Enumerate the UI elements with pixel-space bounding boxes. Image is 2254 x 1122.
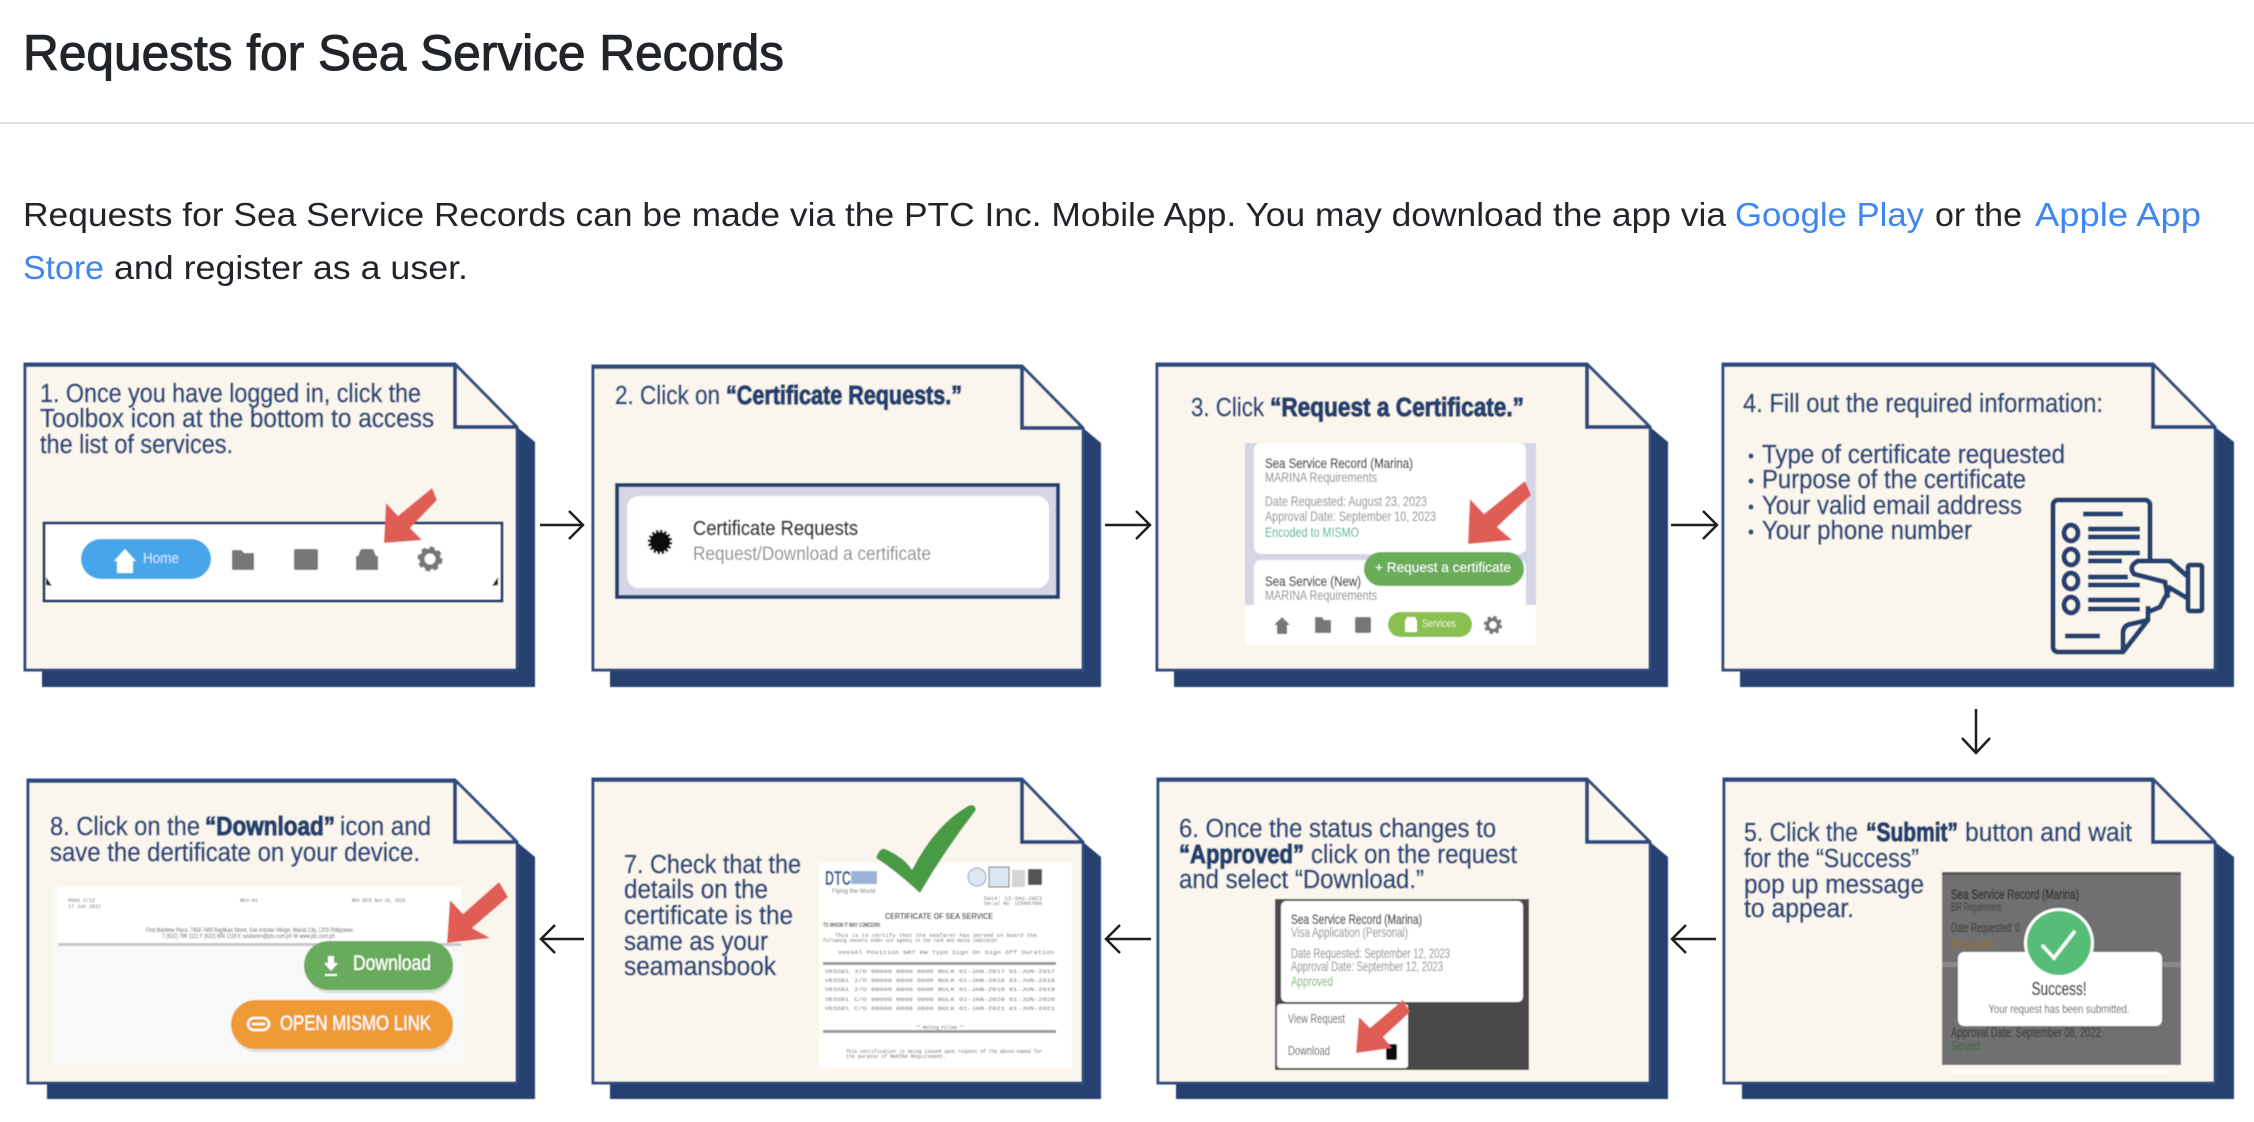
certificate document: Flying the World xyxy=(832,889,875,895)
panel: step 6: Download xyxy=(1288,1043,1330,1058)
panel: step 5 xyxy=(1724,779,2234,1099)
panel: step 5: BIR Requirement xyxy=(1951,900,2001,914)
intro paragraph: and register as a user. xyxy=(114,249,468,286)
certificate document: Vessel Position GRT KW Type Sign On Sign Off Duration xyxy=(838,950,1054,956)
arrow: step 6 to 7 xyxy=(1106,925,1151,953)
intro paragraph: Apple App xyxy=(2035,196,2201,233)
intro paragraph xyxy=(23,196,2201,286)
panel: step 3: Approval Date: September 10, 2023 xyxy=(1265,508,1436,524)
panel: step 5: Sea Service Record (Marina) xyxy=(1951,886,2079,902)
certificate document: the purpose of MARINA Requirement. xyxy=(846,1054,946,1060)
panel: step 8: REV:01 xyxy=(240,898,258,904)
panel: step 2 xyxy=(593,366,1101,687)
panel: step 5: Requested xyxy=(1951,936,1995,951)
panel: step 6: Approval Date: September 12, 2023 xyxy=(1291,958,1443,974)
intro paragraph: Google Play xyxy=(1735,196,1925,233)
certificate document: DTC xyxy=(825,868,851,890)
arrow: step 5 to 6 xyxy=(1672,925,1716,953)
panel: step 3: “Request a Certificate.” xyxy=(1270,394,1524,422)
arrow: step 2 to 3 xyxy=(1105,511,1150,539)
panel: step 2: Request/Download a certificate xyxy=(693,544,931,565)
panel: step 3: Sea Service Record (Marina) xyxy=(1265,455,1413,471)
panel: step 8: OPEN MISMO LINK xyxy=(280,1012,431,1035)
panel: step 5: for the “Success” xyxy=(1744,845,1919,873)
panel: step 8: REV DATE Nov 26, 2019 xyxy=(352,898,405,904)
panel: step 3: Date Requested: August 23, 2023 xyxy=(1265,493,1427,509)
panel: step 3: Encoded to MISMO xyxy=(1265,524,1359,540)
panel: step 6: Visa Application (Personal) xyxy=(1291,924,1408,940)
panel: step 1: Home xyxy=(143,550,179,567)
panel: step 6: Date Requested: September 12, 2023 xyxy=(1291,945,1450,961)
panel: step 8: Download xyxy=(353,952,431,975)
panel: step 8: First Maritime Place, 7458-7460 Bagtikan Street, San Antonio Village, Makati City, 1203 Philippines xyxy=(146,928,353,934)
certificate document: This is to certify that the seafarer has served on board the xyxy=(835,933,1037,939)
panel: step 7: certificate is the xyxy=(624,902,793,930)
panel: step 8: “Download” xyxy=(205,813,335,841)
certificate document: CERTIFICATE OF SEA SERVICE xyxy=(885,912,994,921)
panel: step 5: “Submit” xyxy=(1866,819,1958,847)
panel: step 6: View Request xyxy=(1288,1011,1345,1026)
certificate document: VESSEL 2/O 00000 0000 0000 BULK 01-JAN-2018 01-JUN-2018 xyxy=(825,978,1055,984)
panel: step 7: same as your xyxy=(624,928,768,956)
panel: step 5: Served xyxy=(1951,1038,1980,1053)
panel: step 6: click on the request xyxy=(1311,841,1517,869)
certificate document: ** Nothing Follows ** xyxy=(916,1025,964,1031)
panel: step 5: Approval Date: September 08, 2022 xyxy=(1951,1024,2101,1040)
certificate document: VESSEL C/O 00000 0000 0000 BULK 01-JAN-2020 01-JUN-2020 xyxy=(825,997,1055,1003)
icon: green check mark xyxy=(876,805,976,893)
intro paragraph: Requests for Sea Service Records can be made via the PTC Inc. Mobile App. You may download the app via xyxy=(23,196,1727,233)
arrow: step 7 to 8 xyxy=(541,925,584,953)
certificate document: Date: 12-Sep-2023 xyxy=(984,896,1042,902)
panel: step 1: 1. Once you have logged in, click the xyxy=(40,380,421,408)
panel: step 3: MARINA Requirements xyxy=(1265,587,1377,603)
panel: step 8 xyxy=(28,780,535,1099)
panel: step 5: button and wait xyxy=(1965,819,2132,847)
panel: step 5: 5. Click the xyxy=(1744,819,1858,847)
icon: document and hand xyxy=(2053,500,2202,652)
panel: step 8: PDOS 2/12 xyxy=(68,898,95,904)
certificate document: following vessels under our agency in the rank and dates indicated: xyxy=(823,938,999,944)
panel: step 7: details on the xyxy=(624,876,768,904)
certificate document: VESSEL 3/O 00000 0000 0000 BULK 01-JAN-2017 01-JUN-2017 xyxy=(825,969,1055,975)
panel: step 3: MARINA Requirements xyxy=(1265,469,1377,485)
panel: step 5: to appear. xyxy=(1744,895,1854,923)
panel: step 6: Sea Service Record (Marina) xyxy=(1291,911,1422,927)
panel: step 1: the list of services. xyxy=(40,431,233,459)
certificate document xyxy=(819,863,1072,1068)
arrow: step 1 to 2 xyxy=(540,511,583,539)
panel: step 4 xyxy=(1723,364,2234,687)
panel: step 4: Purpose of the certificate xyxy=(1762,466,2026,494)
panel: step 6: “Approved” xyxy=(1179,841,1304,869)
certificate document: TO WHOM IT MAY CONCERN: xyxy=(823,923,881,929)
panel: step 5: Your request has been submitted. xyxy=(1988,1002,2130,1016)
panel: step 6 xyxy=(1158,779,1668,1099)
panel: step 2: Certificate Requests xyxy=(693,518,858,540)
panel: step 3 xyxy=(1157,364,1668,687)
panel: step 3: Sea Service (New) xyxy=(1265,573,1361,589)
certificate document: This certification is being issued upon request of the above-named for xyxy=(846,1049,1042,1055)
panel: step 6: and select “Download.” xyxy=(1179,866,1424,894)
panel: step 1: Toolbox icon at the bottom to access xyxy=(40,405,434,433)
panel: step 3: Services xyxy=(1422,618,1456,630)
panel: step 8: icon and xyxy=(340,813,431,841)
panel: step 2: “Certificate Requests.” xyxy=(726,382,962,410)
panel: step 5: Date Requested: 0 xyxy=(1951,920,2020,935)
panel: step 6: 6. Once the status changes to xyxy=(1179,815,1496,843)
arrow: step 4 to 5 xyxy=(1962,709,1990,753)
panel: step 8: T (632) 796 1111 F (632) 894 1118 E seafarers@ptc.com.ph W www.ptc.com.ph xyxy=(162,934,335,940)
intro paragraph: or the xyxy=(1935,196,2022,233)
panel: step 4: Your valid email address xyxy=(1762,492,2022,520)
title: Requests for Sea Service Records xyxy=(23,25,784,81)
panel: step 3: + Request a certificate xyxy=(1375,559,1511,575)
panel: step 2: 2. Click on xyxy=(615,382,720,410)
panel: step 1 xyxy=(25,364,535,687)
panel: step 5: pop up message xyxy=(1744,871,1924,899)
certificate document: VESSEL 2/O 00000 0000 0000 BULK 01-JAN-2019 01-JUN-2019 xyxy=(825,987,1055,993)
panel: step 7 xyxy=(593,779,1101,1099)
panel: step 4: Type of certificate requested xyxy=(1762,441,2065,469)
panel: step 7: 7. Check that the xyxy=(624,851,801,879)
certificate document: VESSEL C/O 00000 0000 0000 BULK 01-JAN-2021 01-JUN-2021 xyxy=(825,1006,1055,1012)
panel: step 5: Success! xyxy=(2032,979,2086,999)
panel: step 3: 3. Click xyxy=(1191,394,1264,422)
certificate document: Serial No: 1234567890 xyxy=(984,901,1042,907)
panel: step 4: 4. Fill out the required information: xyxy=(1743,390,2103,418)
arrow: step 3 to 4 xyxy=(1671,511,1717,539)
panel: step 6: Approved xyxy=(1291,973,1333,989)
panel: step 8: save the dertificate on your device. xyxy=(50,839,420,867)
panel: step 7: seamansbook xyxy=(624,953,776,981)
panel: step 8: 8. Click on the xyxy=(50,813,200,841)
panel: step 8: 17 Jun 2021 xyxy=(68,904,101,910)
panel: step 4: Your phone number xyxy=(1762,517,1972,545)
intro paragraph: Store xyxy=(23,249,104,286)
